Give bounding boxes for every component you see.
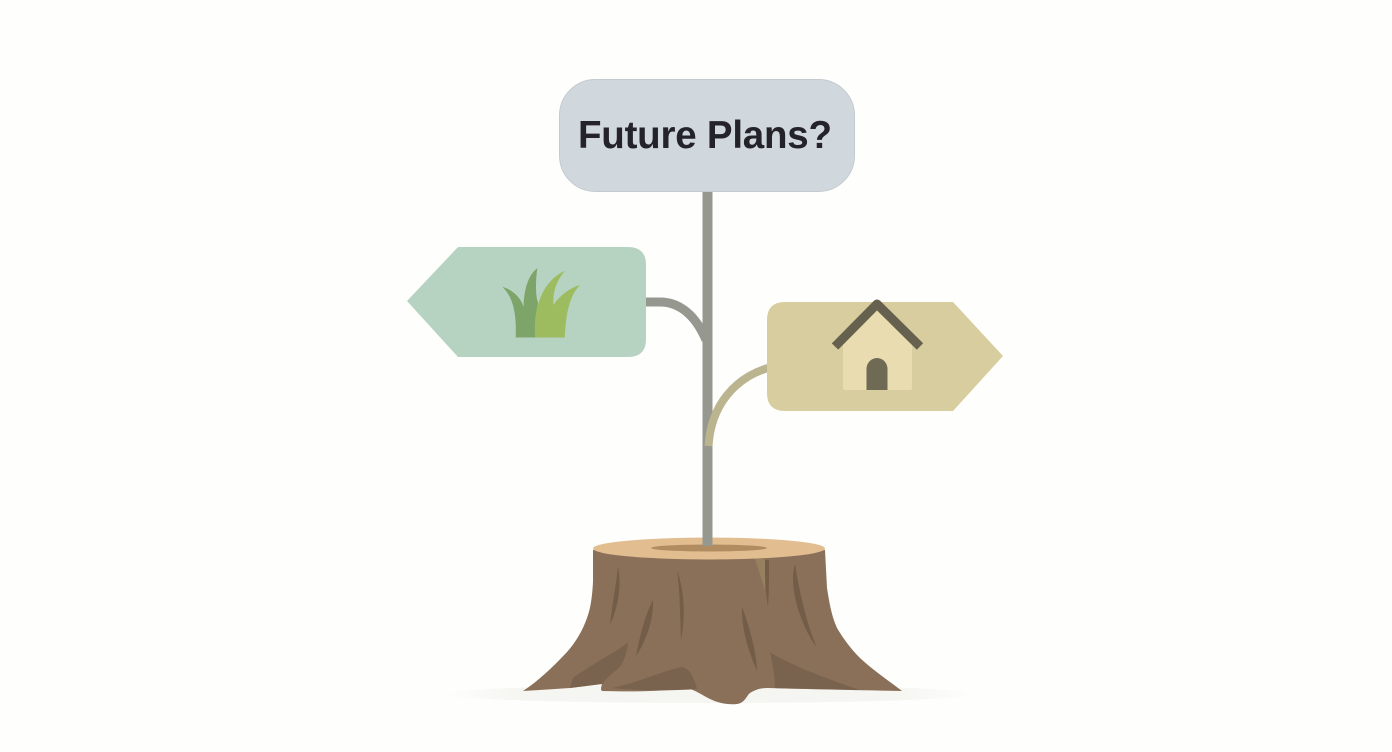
bark light facet	[755, 559, 765, 590]
connector: left sign branch	[645, 302, 706, 340]
icon: grass	[502, 268, 580, 338]
connector: right sign branch	[708, 368, 768, 446]
right root shadow	[770, 652, 860, 690]
stump top	[593, 538, 825, 560]
heading text: Future Plans?	[578, 114, 832, 157]
stump body	[523, 550, 902, 704]
stump inner ring	[651, 544, 767, 552]
centre root shadow	[612, 667, 697, 690]
signpost pole	[702, 190, 712, 547]
tree stump	[523, 530, 902, 704]
ground shadow	[444, 685, 976, 703]
left root shadow	[570, 642, 628, 688]
icon: house	[835, 304, 920, 390]
bark streaks	[610, 560, 817, 671]
pole base	[702, 530, 712, 546]
right sign: house option	[767, 302, 1003, 411]
left sign: grass option	[407, 247, 646, 357]
heading sign: Future Plans?	[560, 80, 854, 192]
